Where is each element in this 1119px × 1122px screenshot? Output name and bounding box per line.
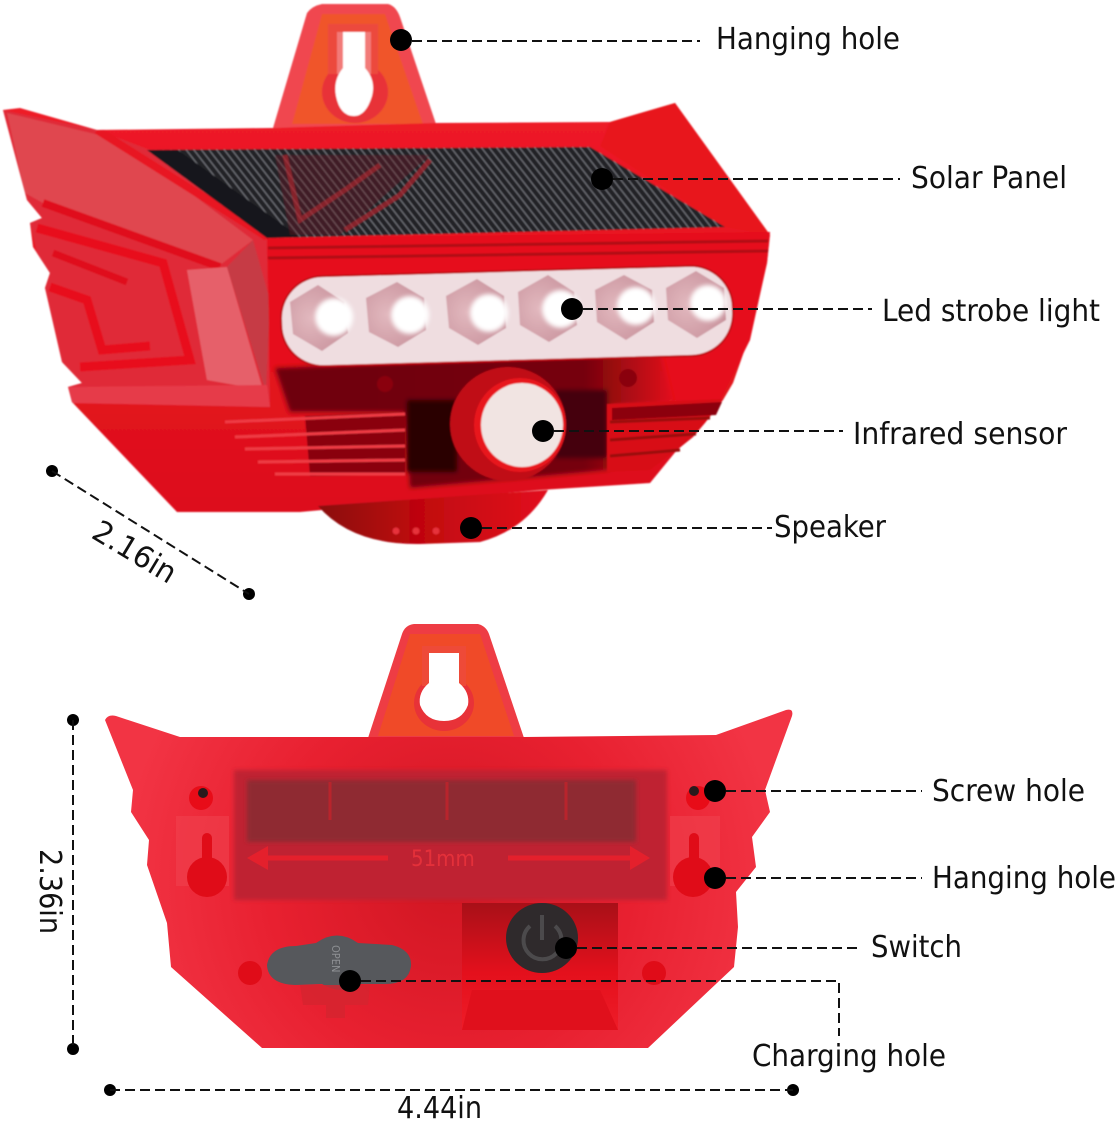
LED lamps	[290, 271, 726, 351]
callout: Speaker: Speaker	[774, 510, 887, 545]
dimension: 2.16in depth	[46, 465, 255, 600]
main body	[3, 103, 770, 512]
dark recess under LED bar	[275, 352, 672, 488]
left wing	[3, 110, 270, 407]
solar panel reflection	[275, 155, 430, 235]
dimension: 2.16in depth: 2.16in	[86, 514, 183, 591]
callout: Hanging hole (top): Hanging hole	[716, 22, 900, 57]
hanging bracket	[273, 4, 437, 128]
right wing tip	[600, 103, 770, 235]
callout: Hanging hole (rear): Hanging hole	[932, 861, 1116, 896]
panel: front view of device	[3, 4, 770, 544]
rear hanging bracket	[368, 624, 524, 738]
rear body	[105, 710, 792, 1048]
callout: Switch	[555, 930, 962, 965]
switch recess	[462, 903, 618, 1030]
power switch	[506, 903, 578, 973]
callout: Led strobe light: Led strobe light	[882, 294, 1100, 329]
cooling fins right	[607, 399, 722, 472]
mounting pegs	[377, 369, 637, 392]
solar panel	[147, 147, 725, 238]
callout: Charging hole: Charging hole	[752, 1039, 946, 1074]
callout: Solar Panel	[591, 161, 1067, 196]
dimension: 2.36in height	[32, 714, 79, 1055]
LED strobe bar	[280, 259, 734, 367]
panel: back view of device	[105, 624, 792, 1048]
callout: Solar Panel: Solar Panel	[911, 161, 1067, 196]
charging port cover	[267, 936, 411, 990]
callout: Led strobe light	[561, 294, 1100, 329]
charging port cover: OPEN	[329, 945, 342, 972]
callout: Screw hole	[704, 774, 1085, 809]
callout: Speaker	[460, 510, 887, 545]
dimension: 2.36in height: 2.36in	[32, 849, 67, 934]
rear hanging holes	[176, 816, 720, 985]
callout: Switch: Switch	[871, 930, 962, 965]
band under panel	[267, 232, 770, 400]
callout: Screw hole: Screw hole	[932, 774, 1085, 809]
callout: Infrared sensor	[532, 417, 1068, 452]
infrared sensor	[450, 367, 566, 481]
screw holes	[189, 786, 710, 810]
callout: Charging hole	[339, 970, 946, 1074]
recessed label panel	[234, 770, 667, 900]
51mm dimension mark	[247, 846, 650, 872]
dimension: 4.44in width	[104, 1084, 799, 1122]
central dark cavity	[407, 400, 457, 472]
callout: Hanging hole (rear)	[704, 861, 1116, 896]
dark cavity right of sensor	[555, 390, 607, 458]
speaker dome	[318, 490, 548, 544]
callout: Infrared sensor: Infrared sensor	[853, 417, 1068, 452]
solar panel dark left corner	[147, 150, 300, 238]
51mm dimension mark: 51mm	[411, 847, 475, 872]
charging port peg	[300, 985, 370, 1018]
callout: Hanging hole (top)	[390, 22, 900, 57]
cooling fins left	[225, 412, 405, 476]
